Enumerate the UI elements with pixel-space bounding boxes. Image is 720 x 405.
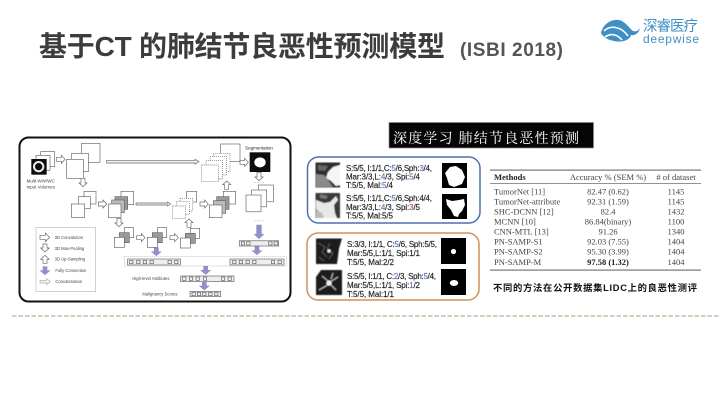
logo wordmark: 深睿医疗: [643, 18, 698, 35]
table rules: [490, 170, 701, 271]
column: accuracy: 95.30 (3.99): [587, 246, 629, 256]
column: dataset: 1432: [668, 206, 684, 216]
nodule text 2: T:5/5, Mal:5/5: [346, 212, 394, 220]
attribute branch: [239, 185, 279, 255]
column: methods: TumorNet-attribute: [494, 196, 560, 206]
input volumes: Input Volumes: [26, 184, 56, 189]
legend: [36, 227, 96, 292]
column: dataset: 1340: [668, 226, 684, 236]
input volumes: [26, 152, 56, 189]
column: methods: TumorNet [11]: [494, 186, 545, 196]
table header: # of dataset: [656, 172, 696, 182]
column: dataset: 1404: [668, 236, 685, 246]
nodule image 3: [316, 238, 342, 264]
panel frame orange: [307, 233, 479, 300]
high-level attributes: High-level Attributes: [132, 276, 169, 281]
column: accuracy: 82.47 (0.62): [587, 186, 629, 196]
column: dataset: 1145: [668, 186, 684, 196]
column: dataset: 1404: [668, 246, 685, 256]
column: dataset: [668, 186, 685, 267]
encoder level 2: [71, 191, 134, 227]
decoder level 2: [173, 191, 236, 227]
long skip arrow 1: [107, 159, 199, 164]
table header: Methods: [494, 172, 526, 182]
mask 3: [441, 238, 466, 264]
icon: waves: [601, 20, 640, 42]
column: accuracy: 82.4: [601, 206, 616, 216]
column: methods: PN-SAMP-S2: [494, 246, 543, 256]
nodule text 1: T:5/5, Mal:5/4: [346, 181, 394, 190]
malignancy scores: [142, 291, 221, 297]
panel: malignant examples: [307, 233, 479, 300]
column: methods: CNN-MTL [13]: [494, 226, 549, 236]
panel: network architecture: [20, 138, 290, 302]
legend: 3D Max-Pooling: [55, 246, 85, 251]
table caption: 不同的方法在公开数据集LIDC上的良恶性测评: [493, 282, 697, 293]
nodule image 4: [316, 270, 342, 295]
nodule text 3: [347, 240, 437, 267]
logo latin name: deepwise: [643, 32, 699, 46]
nodule text 1: Mar:3/3,L:4/3, Spi:5/4: [346, 172, 421, 182]
nodule text 2: Mar:3/3,L:4/3, Spi:3/5: [346, 203, 421, 212]
column: accuracy: 91.26: [598, 226, 618, 236]
column: methods: SHC-DCNN [12]: [494, 206, 554, 216]
table header: Accuracy % (SEM %): [570, 172, 646, 182]
legend: Fully Connection: [55, 268, 87, 273]
column: accuracy: 97.58 (1.32): [587, 257, 629, 267]
nodule image 2: [316, 193, 340, 218]
panel frame: [20, 138, 290, 302]
column: accuracy: 86.84(binary): [585, 216, 631, 226]
mask 1: [442, 163, 467, 188]
heading: deep learning prediction: 深度学习 肺结节良恶性预测: [393, 130, 579, 147]
decoder level 1: [202, 144, 248, 189]
nodule text 4: [347, 272, 436, 299]
legend: Concatenation: [55, 279, 83, 284]
column: dataset: 1145: [668, 196, 684, 206]
column: methods: PN-SAMP-S1: [494, 236, 543, 246]
nodule text 4: T:5/5, Mal:1/1: [347, 290, 395, 299]
malignancy scores: Malignancy Scores: [142, 292, 177, 297]
column: dataset: 1100: [668, 216, 684, 226]
nodule text 3: T:5/5, Mal:2/2: [347, 258, 395, 267]
mask 4: [441, 269, 466, 295]
column: accuracy: [585, 186, 631, 267]
nodule text 4: S:5/5, I:1/1, C:2/3, Sph:5/4,: [347, 272, 436, 281]
results table: [490, 170, 701, 271]
legend: 3D Up-Sampling: [55, 257, 86, 262]
fully connected layer: [124, 257, 286, 266]
heading: deep learning prediction: [389, 122, 594, 148]
skip arrow 2: [136, 202, 171, 206]
nodule text 1: S:5/5, I:1/1,C:5/6,Sph:3/4,: [346, 164, 432, 173]
segmentation output: Segmentation: [245, 145, 273, 150]
title: (ISBI 2018): [460, 40, 563, 61]
table header: [494, 172, 696, 182]
nodule text 3: Mar:5/5,L:1/1, Spi:1/1: [347, 249, 421, 258]
nodule text 3: S:3/3, I:1/1, C:5/6, Sph:5/5,: [347, 240, 437, 249]
mask 2: [442, 194, 467, 219]
high-level attributes: [132, 266, 234, 290]
column: dataset: 1404: [668, 257, 685, 267]
nodule image 1: [316, 162, 340, 188]
panel: benign examples: [308, 157, 480, 223]
column: methods: MCNN [10]: [494, 216, 536, 226]
column: accuracy: 92.03 (7.55): [587, 236, 629, 246]
column: methods: [494, 186, 560, 267]
segmentation output: [245, 145, 273, 183]
encoder level 1: [57, 143, 100, 187]
nodule text 1: [346, 164, 432, 190]
nodule text 2: [346, 194, 432, 220]
legend: 3D Convolution: [55, 235, 84, 240]
input volumes: Multi-WW/WC: [27, 178, 55, 183]
column: methods: PN-SAMP-M: [494, 257, 542, 267]
column: accuracy: 92.31 (1.59): [587, 196, 629, 206]
logo: deepwise: [601, 18, 699, 46]
architecture diagram: [26, 143, 286, 297]
encoder level 3: [114, 228, 200, 256]
nodule text 4: Mar:5/5,L:1/1, Spi:1/2: [347, 281, 421, 290]
panel frame blue: [308, 157, 480, 223]
nodule text 2: S:5/5, I:1/1,C:5/6,Sph:4/4,: [346, 194, 432, 203]
title: 基于CT 的肺结节良恶性预测模型: [39, 31, 445, 62]
